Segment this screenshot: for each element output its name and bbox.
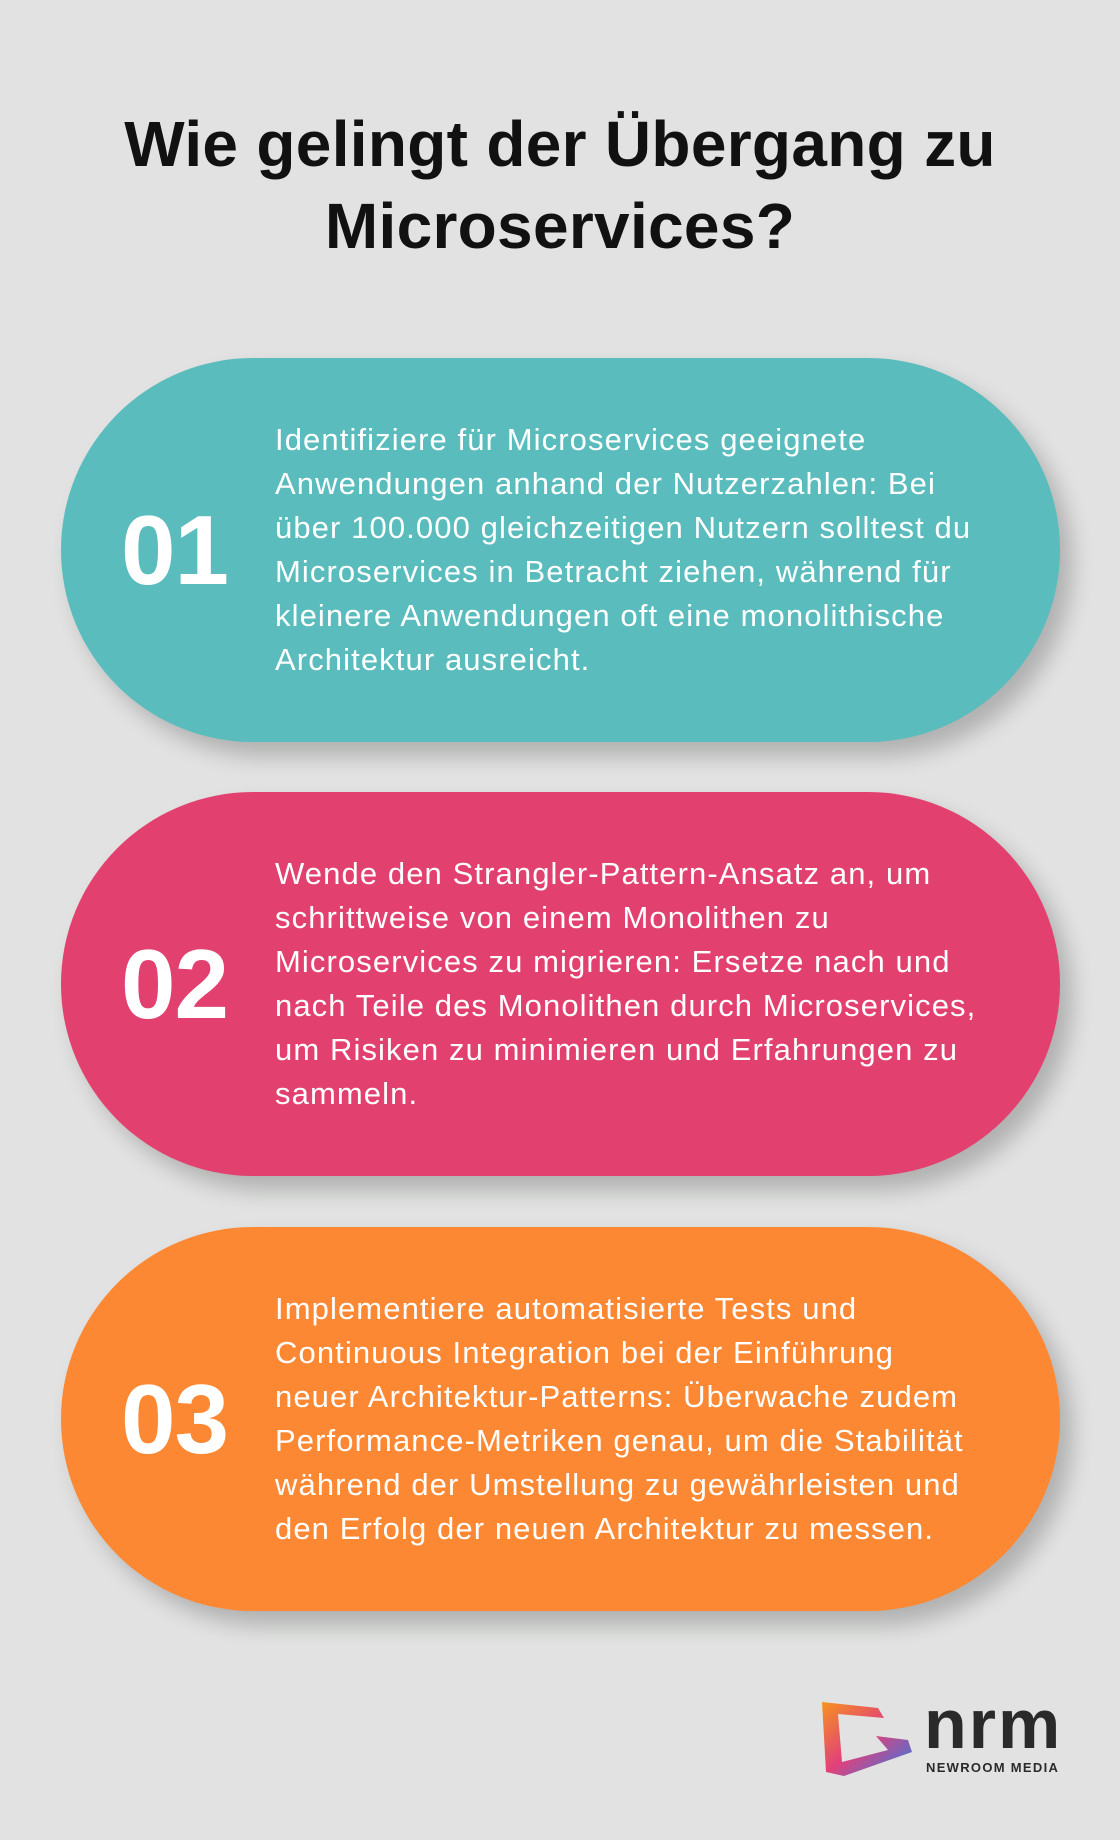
icon: logo mark bbox=[822, 1702, 912, 1776]
text block 02: sammeln. bbox=[275, 1076, 418, 1111]
logo: NEWROOM MEDIA bbox=[926, 1760, 1059, 1775]
panel: step 02 bbox=[61, 792, 1060, 1176]
logo bbox=[822, 1685, 1062, 1776]
text block 01: Anwendungen anhand der Nutzerzahlen: Bei bbox=[275, 466, 936, 501]
panel: step 03 bbox=[61, 1227, 1060, 1611]
number 03: 03 bbox=[121, 1364, 228, 1474]
text block 01: Architektur ausreicht. bbox=[275, 642, 590, 677]
text block 02: schrittweise von einem Monolithen zu bbox=[275, 900, 830, 935]
text block 01: Identifiziere für Microservices geeignete bbox=[275, 422, 866, 457]
text block 01 bbox=[275, 422, 971, 677]
text block 03 bbox=[275, 1291, 964, 1546]
text block 03: während der Umstellung zu gewährleisten und bbox=[275, 1467, 960, 1502]
logo text: nrm bbox=[924, 1685, 1062, 1763]
number 02: 02 bbox=[121, 928, 228, 1038]
text block 02: um Risiken zu minimieren und Erfahrungen zu bbox=[275, 1032, 958, 1067]
text block 03: neuer Architektur-Patterns: Überwache zudem bbox=[275, 1379, 958, 1414]
text block 01: Microservices in Betracht ziehen, während für bbox=[275, 554, 952, 589]
text block 02: Wende den Strangler-Pattern-Ansatz an, um bbox=[275, 856, 931, 891]
title bbox=[124, 108, 996, 262]
text block 01: kleinere Anwendungen oft eine monolithische bbox=[275, 598, 944, 633]
text block 03: Implementiere automatisierte Tests und bbox=[275, 1291, 857, 1326]
text block 02: Microservices zu migrieren: Ersetze nach und bbox=[275, 944, 951, 979]
text block 02 bbox=[275, 856, 976, 1111]
text block 03: Continuous Integration bei der Einführung bbox=[275, 1335, 894, 1370]
number 01: 01 bbox=[121, 494, 228, 604]
title: Microservices? bbox=[325, 190, 795, 262]
text block 03: den Erfolg der neuen Architektur zu messen. bbox=[275, 1511, 934, 1546]
text block 02: nach Teile des Monolithen durch Microservices, bbox=[275, 988, 976, 1023]
panel: step 01 bbox=[61, 358, 1060, 742]
title: Wie gelingt der Übergang zu bbox=[124, 108, 996, 180]
text block 03: Performance-Metriken genau, um die Stabilität bbox=[275, 1423, 964, 1458]
text block 01: über 100.000 gleichzeitigen Nutzern solltest du bbox=[275, 510, 971, 545]
